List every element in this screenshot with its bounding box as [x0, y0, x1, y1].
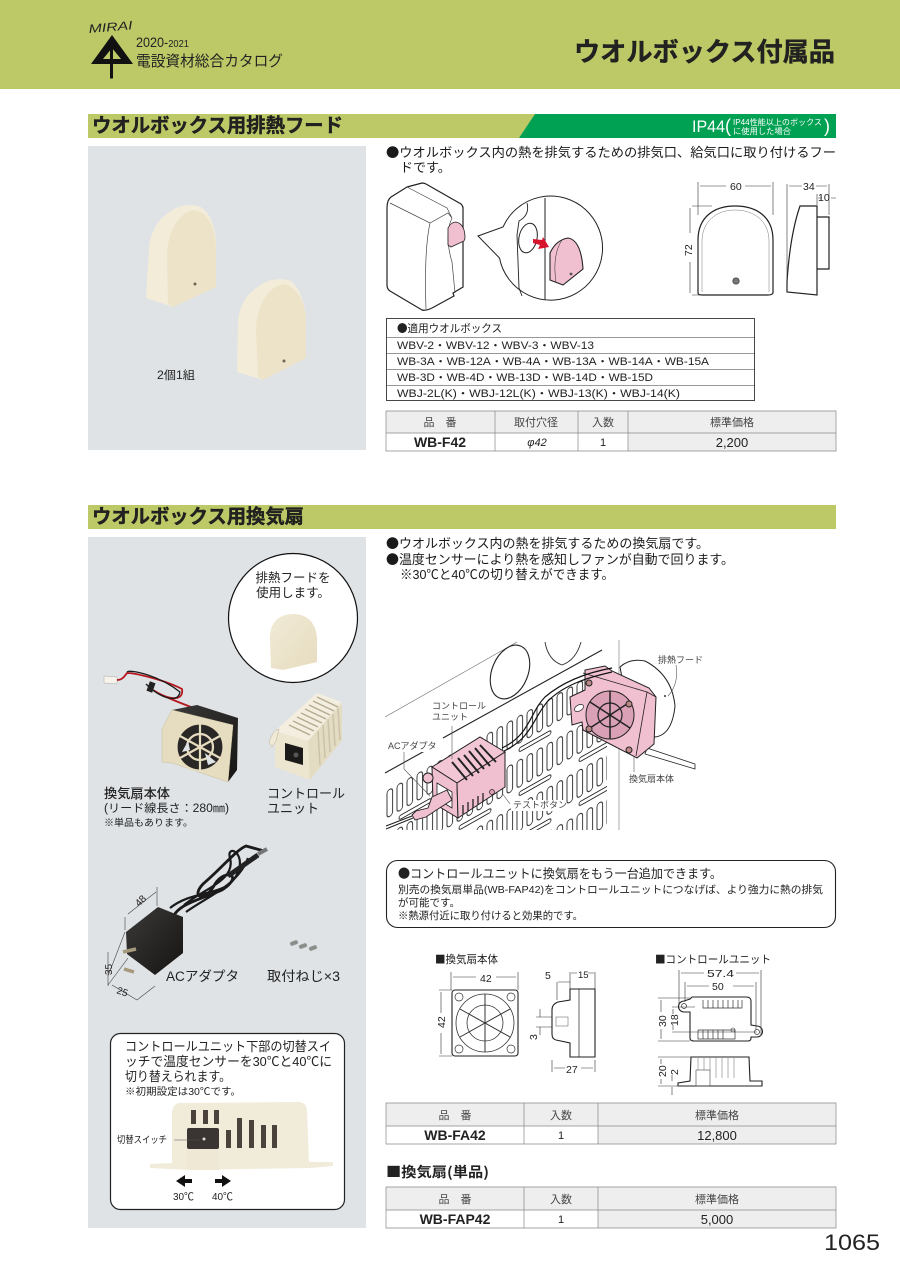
IP44 condition [692, 116, 830, 136]
labels: コントロール [432, 701, 486, 711]
text: fan description [386, 533, 734, 582]
table: WB-FA42 spec: 12,800 [697, 1128, 737, 1143]
label: fan body: 換気扇本体 [104, 785, 170, 801]
photo: AC adapter: 25 [115, 985, 130, 1000]
callout: add second fan: 別売の換気扇単品(WB-FAP42)をコントロールユニットにつなげば、より強力に熱の排気 [398, 883, 824, 896]
label: fan body: ※単品もあります。 [104, 816, 193, 829]
illustration: fan installed in wall box [385, 639, 703, 830]
table: WB-FAP42 spec: 5,000 [701, 1212, 733, 1227]
dimension drawing: control unit: ■コントロールユニット [655, 951, 771, 967]
logo: MIRAI tree mark [88, 18, 134, 78]
photo: screws [290, 940, 317, 951]
table: WB-FAP42 spec: 標準価格 [695, 1192, 739, 1206]
labels: ACアダプタ [388, 740, 437, 751]
diagram: wall box with hood [387, 183, 465, 310]
table: applicable boxes: ●適用ウオルボックス [397, 320, 502, 336]
header band [0, 0, 900, 89]
caption: 2個1組 [157, 369, 196, 382]
table: WB-FAP42 spec [386, 1187, 836, 1228]
dimension drawing: fan body: ■換気扇本体 [435, 951, 498, 967]
front view [436, 972, 518, 1056]
table: applicable boxes: WB-3A・WB-12A・WB-4A・WB-13A・WB-14A・WB-15A [397, 356, 710, 368]
IP44 condition: に使用した場合 [733, 126, 791, 136]
front view: 42 [436, 1016, 448, 1028]
callout: switch note [110, 1034, 344, 1210]
exhaust hood behind fan [620, 660, 695, 769]
IP44 condition: IP44 [692, 117, 725, 136]
section heading: 排熱フード: ウオルボックス用排熱フード [92, 115, 343, 137]
callout: add second fan [386, 860, 836, 928]
labels: ユニット [432, 712, 468, 722]
callout: switch note: 30℃ [173, 1191, 194, 1203]
table: WB-F42 spec: 1 [600, 437, 606, 449]
callout: use exhaust hood: 使用します。 [256, 585, 330, 600]
label: control unit: ユニット [267, 801, 319, 816]
text: hood description: ドです。 [400, 160, 451, 175]
top view: 18 [669, 1014, 681, 1026]
side view: 20 [657, 1065, 669, 1077]
IP44 condition: ) [824, 116, 830, 136]
top view: 30 [657, 1015, 669, 1027]
section heading: 換気扇 [88, 505, 836, 529]
photo: AC adapter: 35 [104, 963, 115, 975]
label: AC adapter: ACアダプタ [166, 969, 239, 984]
callout: add second fan: が可能です。 [398, 896, 460, 909]
dimension drawing: hood side [787, 181, 836, 295]
arrow: 30 left [176, 1175, 192, 1187]
catalog year and name: 2020-2021 [136, 35, 189, 50]
table: WB-FAP42 spec: 入数 [550, 1193, 572, 1206]
top view: 57.4 [707, 968, 734, 980]
photo: hood 2 [237, 279, 306, 380]
label: control unit [267, 786, 345, 816]
IP44 condition: ( [725, 116, 731, 136]
catalog year and name [136, 35, 283, 70]
callout: add second fan: ●コントロールユニットに換気扇をもう一台追加できます。 [398, 863, 722, 882]
red arrow [533, 237, 549, 249]
photo: switch position [150, 1102, 333, 1170]
top view: 50 [712, 981, 724, 993]
side view: 2 [669, 1069, 681, 1075]
box panel with slots [385, 639, 620, 830]
table: applicable boxes: WB-3D・WB-4D・WB-13D・WB-14D・WB-15D [397, 372, 653, 384]
text: fan description: ●温度センサーにより熱を感知しファンが自動で回ります。 [386, 549, 734, 568]
label: control unit: コントロール [267, 786, 345, 801]
IP44 condition: IP44性能以上のボックス [733, 117, 822, 127]
table: WB-FA42 spec: WB-FA42 [424, 1127, 486, 1143]
table: applicable boxes [386, 318, 755, 400]
side view [528, 970, 595, 1076]
dimension drawing: hood side: 10 [818, 192, 830, 204]
table: WB-FA42 spec: 入数 [550, 1109, 572, 1122]
front view: 42 [480, 973, 492, 985]
table: WB-F42 spec: 入数 [592, 416, 614, 429]
dimension drawing: hood side: 34 [803, 181, 815, 193]
table: WB-F42 spec: 2,200 [716, 435, 748, 450]
table: WB-F42 spec [386, 411, 836, 451]
label: screws: 取付ねじ×3 [267, 969, 340, 984]
callout: use exhaust hood [228, 554, 358, 682]
label: fan body [104, 785, 229, 829]
labels [387, 654, 703, 811]
table: WB-F42 spec: WB-F42 [414, 434, 466, 450]
wires [502, 668, 612, 751]
AC plug and cord [386, 790, 452, 829]
photo: AC adapter [104, 846, 267, 1000]
side view: 3 [528, 1034, 540, 1040]
pink control unit [423, 737, 505, 818]
photo: hood 1 [146, 205, 216, 307]
dimension drawing: control unit [655, 951, 771, 1095]
table: WB-FA42 spec [386, 1103, 836, 1144]
callout: switch note: ッチで温度センサーを30℃と40℃に [125, 1054, 332, 1069]
side view: 5 [545, 970, 551, 982]
table: WB-F42 spec: 品 番 [424, 416, 456, 429]
dimension drawing: hood front: 60 [730, 181, 742, 193]
labels: 排熱フード [658, 654, 703, 665]
leader lines [404, 665, 677, 804]
photo: fan body [104, 671, 238, 782]
diagram: magnified hood installation [478, 196, 603, 300]
callout: switch note: コントロールユニット下部の切替スイ [125, 1039, 331, 1054]
table: WB-F42 spec: 標準価格 [710, 415, 754, 429]
callout: switch note: 40℃ [212, 1191, 233, 1203]
page title: ウオルボックス付属品 [574, 37, 835, 67]
label: fan body: (リード線長さ：280㎜) [104, 802, 229, 815]
side view: 27 [566, 1064, 578, 1076]
text: fan description: ※30℃と40℃の切り替えができます。 [400, 567, 614, 582]
table: WB-FAP42 spec: 1 [558, 1214, 564, 1226]
section heading: 排熱フード [88, 114, 836, 138]
table: applicable boxes: WBV-2・WBV-12・WBV-3・WBV-13 [397, 340, 594, 352]
table: WB-FAP42 spec: 品 番 [438, 1193, 472, 1206]
table: WB-F42 spec: 取付穴径 [514, 416, 558, 429]
table: WB-FAP42 spec: WB-FAP42 [420, 1211, 491, 1227]
page number: 1065 [824, 1230, 880, 1255]
table: WB-FA42 spec: 品 番 [438, 1109, 472, 1122]
text: hood description: ●ウオルボックス内の熱を排気するための排気口、給気口に取り付けるフー [386, 142, 836, 161]
side view: 15 [578, 970, 589, 981]
dimension drawing: hood front [683, 181, 773, 295]
labels: テストボタン [513, 800, 567, 810]
photo: control unit [269, 693, 342, 780]
logo: MIRAI tree mark: MIRAI [88, 18, 134, 36]
arrow: 40 right [215, 1175, 231, 1187]
dimension drawing: fan body [435, 951, 595, 1076]
text: hood description [386, 142, 836, 175]
side view [657, 1057, 762, 1095]
dimension drawing: hood front: 72 [683, 244, 695, 256]
callout: switch note: 切り替えられます。 [125, 1069, 231, 1084]
table: applicable boxes: WBJ-2L(K)・WBJ-12L(K)・WBJ-13(K)・WBJ-14(K) [397, 388, 680, 400]
callout: switch note: ※初期設定は30℃です。 [125, 1085, 241, 1098]
pink hood [550, 238, 583, 285]
callout: use exhaust hood: 排熱フードを [255, 571, 331, 585]
pink hood [448, 222, 465, 247]
panel: hood photo [88, 146, 366, 450]
heading: single fan: ■換気扇(単品) [386, 1162, 489, 1182]
photo: AC adapter: 48 [133, 893, 149, 909]
text: fan description: ●ウオルボックス内の熱を排気するための換気扇です。 [386, 533, 709, 552]
callout: add second fan: ※熱源付近に取り付けると効果的です。 [398, 909, 583, 922]
top view [657, 968, 762, 1041]
callout: switch note: 切替スイッチ [117, 1134, 167, 1146]
section heading: 換気扇: ウオルボックス用換気扇 [92, 505, 304, 528]
labels: 換気扇本体 [629, 773, 674, 784]
catalog year and name: 電設資材総合カタログ [136, 53, 283, 70]
table: WB-FA42 spec: 1 [558, 1130, 564, 1142]
table: WB-F42 spec: φ42 [527, 437, 547, 449]
table: WB-FA42 spec: 標準価格 [695, 1108, 739, 1122]
panel: fan components [88, 537, 366, 1228]
pink fan body [570, 666, 656, 758]
